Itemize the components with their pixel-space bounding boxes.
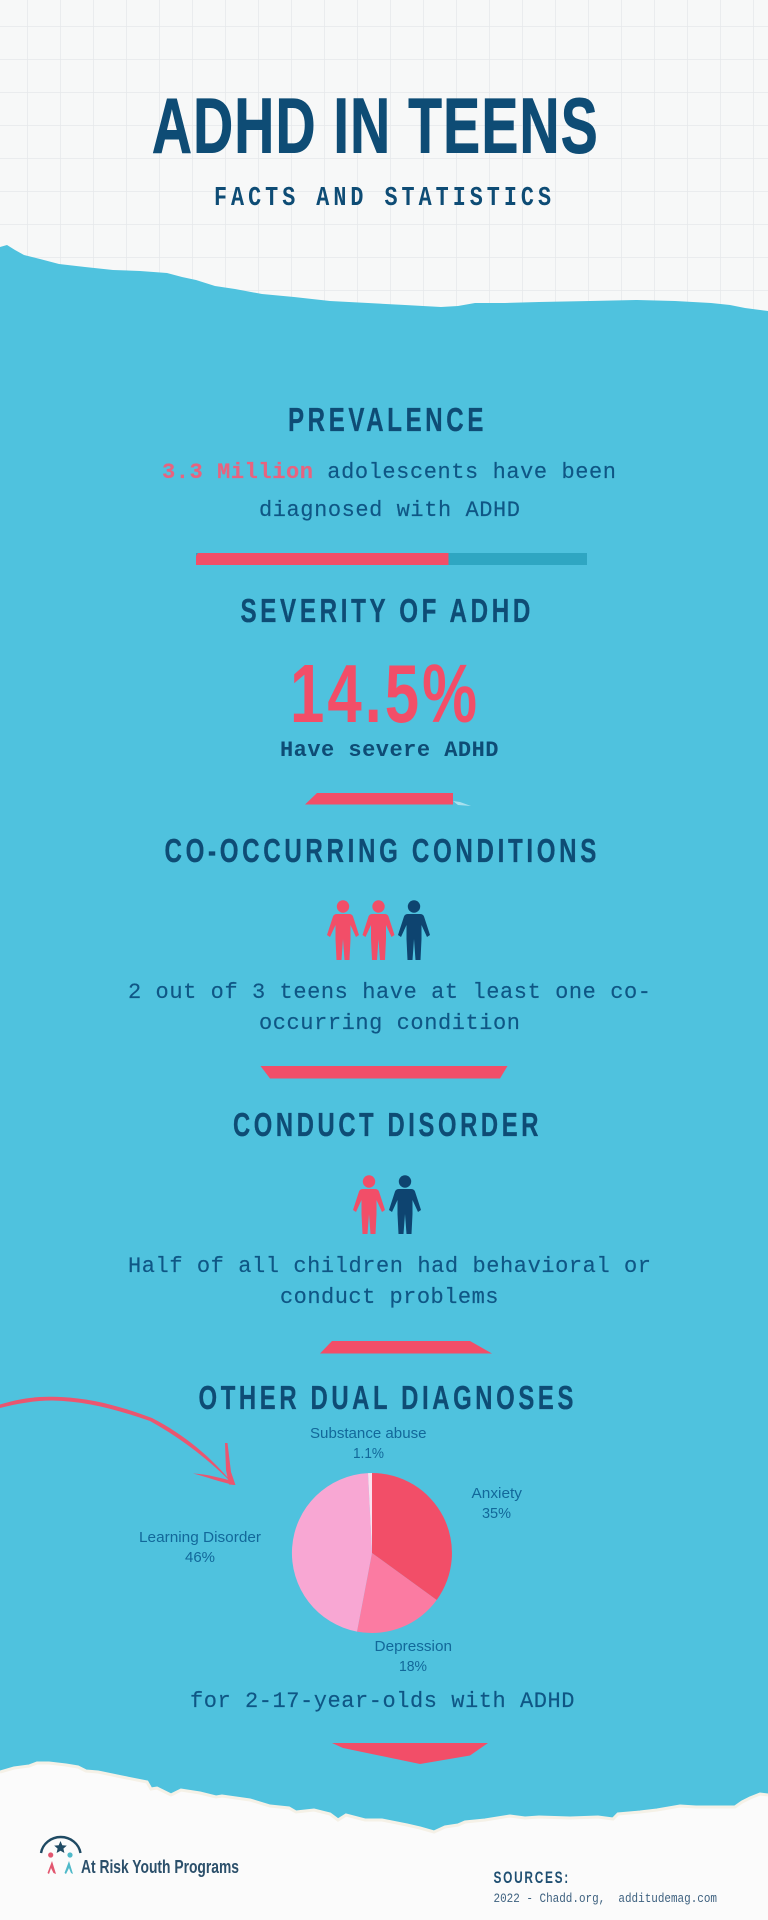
label: substance abuse: 1.1% — [353, 1445, 384, 1462]
icon: two people — [353, 1175, 421, 1234]
text: logo name: At Risk Youth Programs — [81, 1857, 239, 1877]
text: half of all children line one: Half of all children had behavioral or — [128, 1254, 651, 1279]
label: depression — [374, 1638, 452, 1675]
icon: logo arc and figures — [41, 1837, 80, 1874]
bar: severity — [305, 793, 471, 806]
icon: three people — [327, 900, 430, 960]
heading: co-occurring conditions: CO-OCCURRING CONDITIONS — [164, 832, 600, 869]
title: ADHD IN TEENS — [152, 82, 599, 170]
panel: prevalence — [162, 401, 616, 565]
label: anxiety — [472, 1485, 522, 1522]
bar: prevalence progress — [196, 553, 587, 565]
label: learning disorder: Learning Disorder — [139, 1529, 261, 1546]
label: depression: Depression — [374, 1638, 452, 1655]
label: anxiety: Anxiety — [472, 1485, 522, 1502]
heading: prevalence: PREVALENCE — [288, 401, 487, 438]
panel: co-occurring conditions — [128, 832, 651, 1078]
heading: severity of ADHD: SEVERITY OF ADHD — [240, 592, 534, 629]
pie chart — [292, 1473, 452, 1633]
label: substance abuse: Substance abuse — [310, 1425, 426, 1442]
label: anxiety: 35% — [482, 1505, 511, 1522]
caption: age range: for 2-17-year-olds with ADHD — [190, 1689, 574, 1714]
label: substance abuse — [310, 1425, 426, 1462]
panel: conduct disorder — [128, 1106, 651, 1354]
text: 2 out of 3 line one: 2 out of 3 teens have at least one co- — [128, 980, 651, 1005]
label: learning disorder: 46% — [185, 1549, 215, 1566]
big number: 14.5%: 14.5% — [290, 647, 480, 740]
text: source list: 2022 - Chadd.org, additudemag.com — [494, 1892, 717, 1906]
label: depression: 18% — [399, 1658, 427, 1675]
bar: conduct — [320, 1341, 492, 1354]
text: diagnosed line two: diagnosed with ADHD — [259, 498, 520, 523]
label: learning disorder — [139, 1529, 261, 1566]
panel: severity — [240, 592, 534, 806]
text: conduct problems line two: conduct problems — [280, 1285, 498, 1310]
bar: dual diagnoses — [332, 1743, 488, 1764]
panel: sources — [494, 1868, 717, 1906]
text: 3.3 million line one: 3.3 Million adolescents have been — [162, 460, 616, 485]
subtitle: FACTS AND STATISTICS — [214, 184, 555, 214]
logo: At Risk Youth Programs — [41, 1837, 239, 1877]
panel: torn paper footer — [0, 1763, 768, 1920]
heading: other dual diagnoses: OTHER DUAL DIAGNOSES — [198, 1379, 577, 1416]
text: have severe ADHD: Have severe ADHD — [280, 738, 498, 763]
heading: conduct disorder: CONDUCT DISORDER — [233, 1106, 542, 1143]
bar: co-occurring — [260, 1066, 508, 1078]
text: occurring condition line two: occurring condition — [259, 1011, 520, 1036]
arrow: curved arrow to pie chart — [0, 1397, 236, 1485]
panel: other dual diagnoses — [0, 1379, 577, 1764]
panel: graph paper header background — [0, 0, 768, 330]
heading: sources: SOURCES: — [494, 1868, 570, 1887]
